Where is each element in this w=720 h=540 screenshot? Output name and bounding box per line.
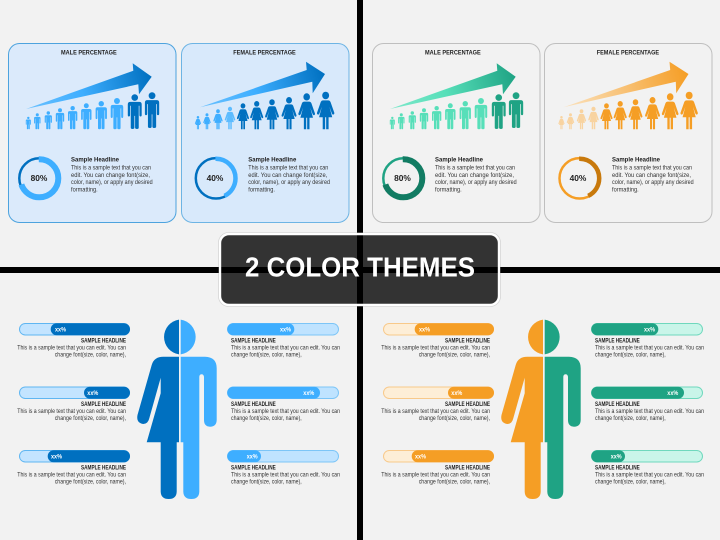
left bar 1: SAMPLE HEADLINE <box>445 337 490 344</box>
left bar 3: This is a sample text that you can edit. You can <box>17 471 126 478</box>
donut 80% <box>19 158 59 198</box>
arrow <box>564 62 688 107</box>
vertical divider <box>357 0 363 540</box>
panel: male percentage green <box>372 44 540 222</box>
left bar 2 <box>17 387 130 422</box>
text block: This is a sample text that you can <box>71 164 151 172</box>
left bar 3: This is a sample text that you can edit. You can <box>381 471 490 478</box>
left bar 1: This is a sample text that you can edit. You can <box>17 344 126 351</box>
right bar 1: change font(size, color, name), <box>595 352 666 359</box>
right bar 2 <box>227 387 340 422</box>
heading: FEMALE PERCENTAGE <box>233 49 296 56</box>
text block: Sample Headline <box>248 157 297 164</box>
left bar 3: change font(size, color, name), <box>419 479 490 486</box>
text block <box>435 157 517 193</box>
right bar 3: change font(size, color, name), <box>231 479 302 486</box>
left bar 2: SAMPLE HEADLINE <box>445 401 490 408</box>
heading: MALE PERCENTAGE <box>61 49 117 56</box>
left bar 1: xx% <box>55 326 66 334</box>
donut 80%: 80% <box>394 173 411 183</box>
right bar 3: xx% <box>247 454 258 460</box>
right bar 2 <box>591 387 704 422</box>
left bar 3 <box>381 450 494 486</box>
right bar 3: SAMPLE HEADLINE <box>595 464 640 471</box>
donut 40% <box>560 158 600 198</box>
right bar 3 <box>591 450 704 486</box>
left bar 1: change font(size, color, name), <box>55 352 126 359</box>
heading: FEMALE PERCENTAGE <box>597 49 659 56</box>
text block: formatting. <box>248 186 275 193</box>
left bar 3: change font(size, color, name), <box>55 479 126 486</box>
section: orange and green gender infographic <box>381 320 704 499</box>
right bar 2: SAMPLE HEADLINE <box>595 401 640 408</box>
donut 40%: 40% <box>570 173 587 183</box>
right bar 1 <box>227 323 340 359</box>
figure: split person <box>137 320 217 499</box>
left bar 1: xx% <box>419 326 430 334</box>
right bar 3: xx% <box>611 454 622 460</box>
text block: edit. You can change font(size, <box>612 172 691 179</box>
text block: edit. You can change font(size, <box>435 172 514 179</box>
people row <box>195 92 334 129</box>
left bar 2: SAMPLE HEADLINE <box>81 401 126 408</box>
right bar 2: change font(size, color, name), <box>595 415 666 422</box>
right bar 3: This is a sample text that you can edit. You can <box>231 471 340 478</box>
text block: color, name), or apply any desired <box>612 179 694 186</box>
right bar 1: SAMPLE HEADLINE <box>595 337 640 344</box>
text block: Sample Headline <box>612 157 660 164</box>
left bar 2: change font(size, color, name), <box>419 415 490 422</box>
right bar 2: xx% <box>303 390 314 397</box>
left bar 3: SAMPLE HEADLINE <box>445 464 490 471</box>
left bar 2: This is a sample text that you can edit. You can <box>17 408 126 415</box>
left bar 2: xx% <box>451 390 462 397</box>
left bar 3: xx% <box>415 454 426 460</box>
text block: Sample Headline <box>71 157 119 164</box>
panel: male percentage blue <box>8 44 176 222</box>
left bar 3: xx% <box>51 454 62 460</box>
text block: edit. You can change font(size, <box>71 172 150 179</box>
banner title: 2 COLOR THEMES <box>245 252 475 283</box>
figure: split person <box>501 320 581 499</box>
donut 40% <box>196 158 236 198</box>
left bar 1: This is a sample text that you can edit. You can <box>381 344 490 351</box>
left bar 1: change font(size, color, name), <box>419 352 490 359</box>
text block: Sample Headline <box>435 157 483 164</box>
text block <box>71 157 153 193</box>
text block: edit. You can change font(size, <box>248 172 328 179</box>
left bar 2 <box>381 387 494 422</box>
arrow <box>26 63 152 109</box>
right bar 1: change font(size, color, name), <box>231 352 302 359</box>
left bar 2: This is a sample text that you can edit. You can <box>381 408 490 415</box>
donut 40%: 40% <box>207 173 224 183</box>
left bar 2: xx% <box>87 390 98 397</box>
left bar 3: SAMPLE HEADLINE <box>81 464 126 471</box>
left bar 1 <box>381 323 494 359</box>
text block: color, name), or apply any desired <box>435 179 517 186</box>
people row <box>26 92 159 129</box>
section: blue gender infographic <box>17 320 340 499</box>
right bar 3: change font(size, color, name), <box>595 479 666 486</box>
text block <box>612 157 694 193</box>
arrow <box>390 63 516 109</box>
heading: MALE PERCENTAGE <box>425 49 481 56</box>
left bar 1 <box>17 323 130 359</box>
right bar 1: This is a sample text that you can edit. You can <box>231 344 340 351</box>
text block: This is a sample text that you can <box>248 164 329 172</box>
right bar 2: SAMPLE HEADLINE <box>231 401 276 408</box>
panel: female percentage blue <box>182 44 349 222</box>
donut 80% <box>383 158 423 198</box>
right bar 1: SAMPLE HEADLINE <box>231 337 276 344</box>
people row <box>558 92 698 129</box>
right bar 1: xx% <box>280 326 291 334</box>
left bar 3 <box>17 450 130 486</box>
text block: formatting. <box>71 186 98 193</box>
text block: color, name), or apply any desired <box>248 179 330 186</box>
left bar 1: SAMPLE HEADLINE <box>81 337 126 344</box>
right bar 3: SAMPLE HEADLINE <box>231 464 276 471</box>
right bar 2: change font(size, color, name), <box>231 415 302 422</box>
right bar 2: This is a sample text that you can edit. You can <box>231 408 340 415</box>
arrow <box>200 62 325 107</box>
right bar 1: xx% <box>644 326 655 334</box>
right bar 3 <box>227 450 340 486</box>
banner: 2 color themes <box>218 232 501 307</box>
horizontal divider <box>0 267 720 273</box>
donut 80%: 80% <box>31 173 48 183</box>
text block: formatting. <box>435 186 462 193</box>
text block: formatting. <box>612 186 639 193</box>
text block: This is a sample text that you can <box>435 164 515 172</box>
right bar 2: xx% <box>667 390 678 397</box>
text block <box>248 157 330 193</box>
text block: This is a sample text that you can <box>612 164 692 172</box>
panel: female percentage orange <box>544 44 712 222</box>
text block: color, name), or apply any desired <box>71 179 153 186</box>
people row <box>390 92 523 129</box>
left bar 2: change font(size, color, name), <box>55 415 126 422</box>
right bar 1 <box>591 323 704 359</box>
